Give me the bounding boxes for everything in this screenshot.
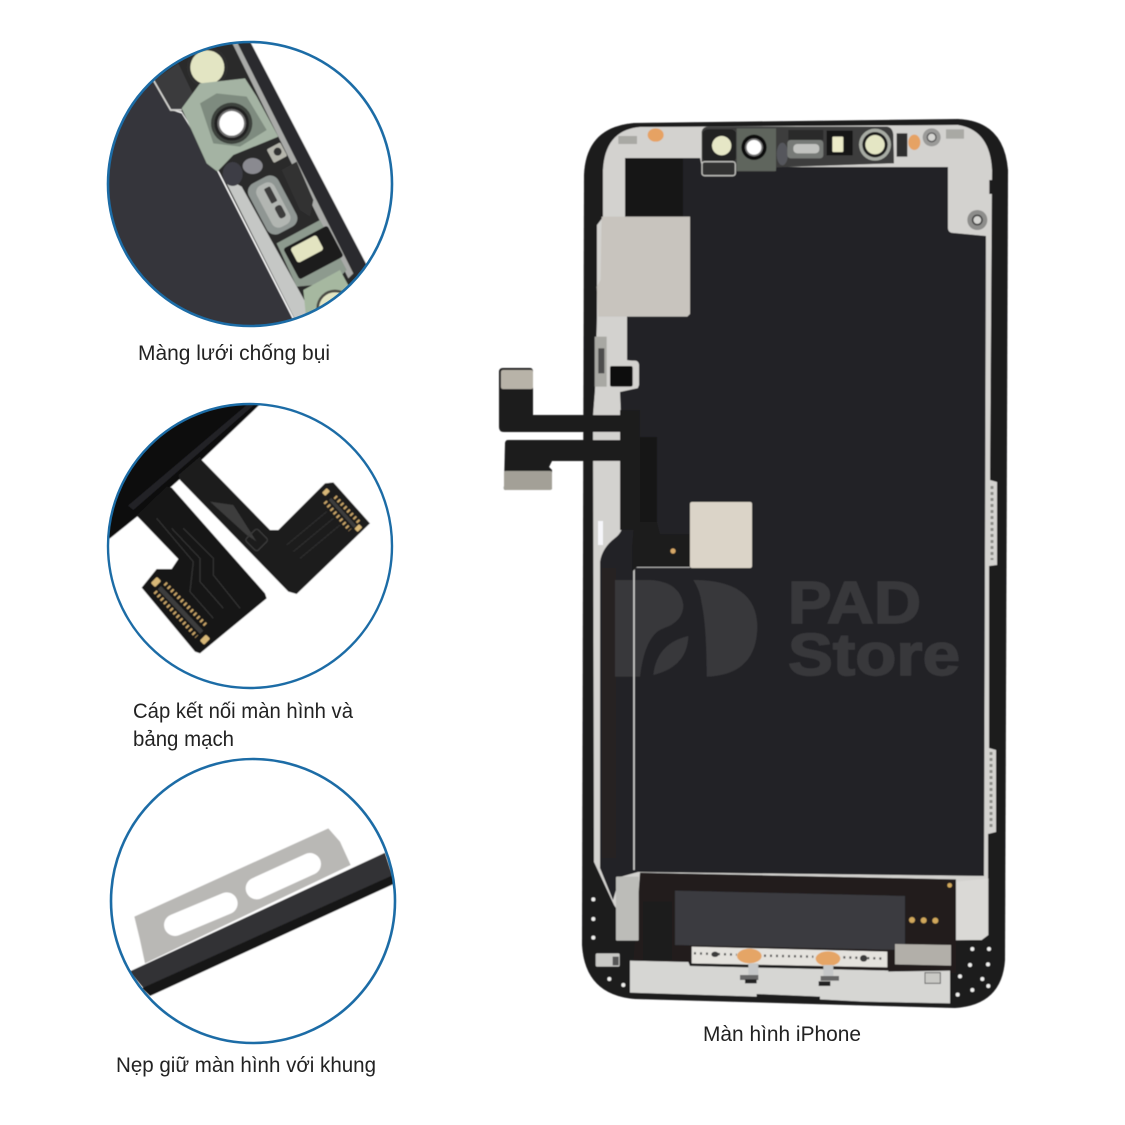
- top sensor assembly and plates: [595, 127, 994, 389]
- caption: iPhone display: Màn hình iPhone: [703, 1023, 861, 1046]
- ribbon tab right: [819, 965, 839, 986]
- panel: iPhone display back view: [499, 119, 1008, 1008]
- phone body: [582, 119, 1008, 1008]
- dark flex: [633, 873, 956, 973]
- flex cable vertical: [640, 437, 657, 529]
- orange pad left: [648, 128, 664, 142]
- orange pad right: [908, 135, 920, 150]
- screw right: [967, 210, 987, 230]
- sensor bar: [702, 127, 894, 172]
- small label: [925, 973, 940, 983]
- clip teeth: [991, 486, 992, 828]
- small flex connector: [595, 337, 607, 387]
- connector left: [618, 136, 637, 144]
- right dot projector: [859, 129, 891, 161]
- small grey tab: [897, 133, 907, 157]
- bottom left tag: [596, 953, 620, 967]
- tag connector: [613, 957, 619, 965]
- connector slot: [598, 348, 604, 373]
- metal plate: [597, 217, 690, 317]
- caption: dust mesh: Màng lưới chống bụi: [138, 342, 330, 365]
- infographic canvas: [106, 40, 1009, 1076]
- flood module: [703, 129, 736, 162]
- bottom centre notch: [757, 994, 820, 1001]
- watermark logo: [615, 580, 757, 677]
- camera lens: [741, 135, 767, 160]
- dark upper-left block: [625, 158, 683, 218]
- bracket around camera: [737, 128, 776, 171]
- caption: connector cable: Cáp kết nối màn hình và: [133, 700, 353, 723]
- grey shield: [895, 944, 951, 966]
- screw top: [923, 128, 941, 146]
- orange pad bottom right: [816, 951, 840, 966]
- silver bracket around black square: [613, 361, 639, 389]
- watermark: PAD Store: [615, 570, 960, 688]
- bottom flex and pads: [591, 873, 991, 1003]
- flex cable upper: [499, 368, 622, 432]
- white reflection patch: [598, 521, 603, 545]
- silver pad lower: [504, 471, 552, 490]
- grey panel: [675, 891, 905, 950]
- panel: dust mesh detail circle: [100, 30, 400, 330]
- side notch: [989, 180, 994, 194]
- square metal shield: [690, 502, 752, 568]
- strip dots: [694, 952, 884, 962]
- ribbon tab left: [740, 963, 758, 983]
- connector right: [946, 129, 964, 139]
- silver frame: [593, 125, 997, 945]
- small sensor window: [827, 131, 853, 155]
- display panel: [600, 158, 986, 900]
- flex cable junction: [632, 522, 692, 572]
- panel: retaining bracket detail circle: [100, 750, 400, 1050]
- light strip: [692, 947, 887, 967]
- grey proximity oval: [777, 143, 788, 165]
- darker block: [643, 902, 672, 960]
- gold contact: [670, 548, 676, 554]
- dark left column: [602, 568, 616, 858]
- left metal tile: [616, 877, 639, 941]
- orange pad bottom left: [737, 949, 762, 963]
- earpiece: [787, 130, 823, 158]
- black tab under sensors: [702, 162, 735, 176]
- flex cable lower: [504, 440, 624, 490]
- watermark text PAD: PAD: [788, 570, 921, 636]
- watermark text Store: Store: [788, 622, 960, 688]
- gold contacts: [909, 883, 952, 924]
- bottom silver plate: [630, 961, 950, 1003]
- caption: connector cable second line: bảng mạch: [133, 728, 234, 751]
- flex cable vertical shadow: [620, 410, 640, 530]
- flood circle: [712, 136, 731, 155]
- frame dots: [591, 897, 991, 997]
- black square: [610, 366, 633, 387]
- silver pad upper: [501, 370, 533, 389]
- right metal tile: [957, 878, 988, 940]
- panel: connector cable detail circle: [100, 395, 400, 695]
- thin silver trace line: [634, 567, 690, 870]
- caption: retaining bracket: Nẹp giữ màn hình với khung: [116, 1054, 376, 1077]
